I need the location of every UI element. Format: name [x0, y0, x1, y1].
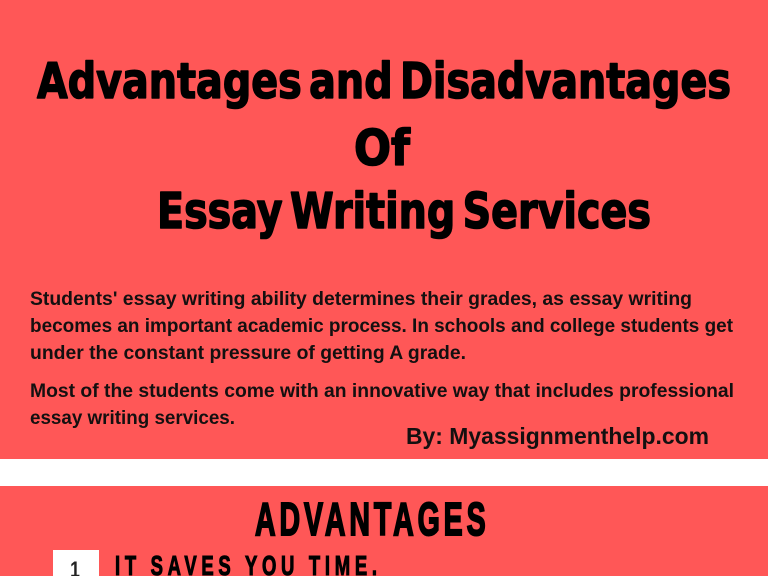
- intro paragraph 1: Students' essay writing ability determines their grades, as essay writing: [30, 289, 692, 310]
- title: Of: [354, 120, 411, 177]
- intro paragraph 2: Most of the students come with an innovative way that includes professional: [30, 381, 734, 402]
- panel: advantages: [0, 486, 768, 576]
- heading: advantages: ADVANTAGES: [255, 494, 486, 546]
- title: [37, 53, 731, 240]
- author credit: By: Myassignmenthelp.com: [406, 423, 709, 449]
- panel: introduction: [0, 0, 768, 459]
- intro paragraph 1: [30, 289, 734, 364]
- intro paragraph 1: becomes an important academic process. In schools and college students get: [30, 316, 734, 337]
- intro paragraph 1: under the constant pressure of getting A grade.: [30, 343, 466, 364]
- number badge 1: [53, 550, 99, 576]
- intro paragraph 2: [30, 381, 734, 429]
- white divider band: [0, 459, 768, 486]
- intro paragraph 2: essay writing services.: [30, 408, 235, 429]
- title: Essay Writing Services: [157, 183, 651, 240]
